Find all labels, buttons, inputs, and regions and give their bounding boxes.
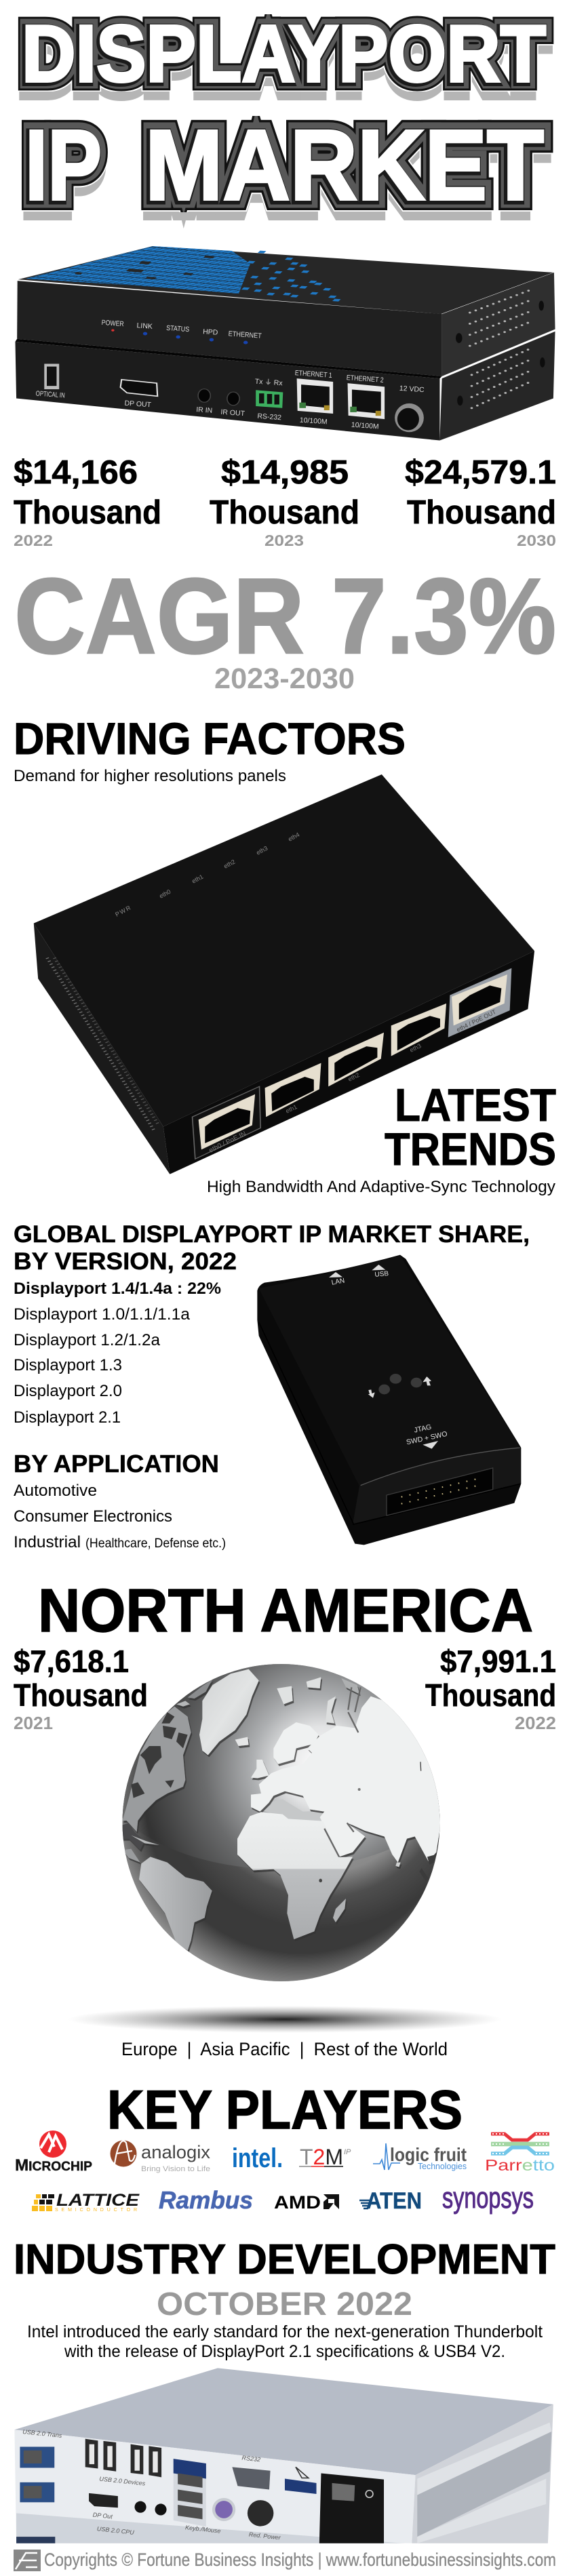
product image: JTAG probe: SWD + SWO [406,1430,448,1446]
latest trends text: High Bandwidth And Adaptive-Sync Technology [207,1178,555,1196]
heading: market share by version: BY VERSION, 2022 [14,1248,237,1275]
stat: 2023 market size: 2023 [264,532,304,549]
logo: Lattice Semiconductor: SEMICONDUCTOR [55,2208,137,2213]
labels on KVM extender: Keyb./Mouse [185,2524,221,2535]
product image: ethernet router: PWR [114,904,132,918]
logo: analogix: Bring Vision to Life [141,2165,210,2173]
logo: analogix [110,2140,211,2173]
product image: JTAG probe: LAN [331,1277,345,1287]
product image: DisplayPort extender: POWER [101,319,124,328]
product image: DisplayPort extender: DP OUT [124,399,152,409]
logo: Microchip: MICROCHIP [15,2156,92,2175]
globe ground shadow [68,2006,502,2033]
globe [122,1664,439,1981]
product image: ethernet router: eth0 [158,888,172,900]
development date: OCTOBER 2022 [157,2286,412,2322]
product image: ethernet router: eth1 [191,873,204,885]
version list: Displayport 1.0/1.1/1.1a [14,1305,190,1324]
heading: by application: BY APPLICATION [14,1450,219,1478]
logo: logic fruit: Technologies [418,2161,467,2171]
application list: (Healthcare, Defense etc.) [85,1537,226,1551]
land: continents [122,1669,440,1951]
product image: JTAG probe: USB [374,1270,389,1279]
stat: 2030 market size: 2030 [517,532,556,549]
development text: Intel introduced the early standard for the next-generation Thunderbolt [27,2322,543,2341]
stat: 2023 market size: $14,985 [221,454,349,491]
heading: industry development: INDUSTRY DEVELOPMENT [14,2236,555,2283]
title: IP Market: MARKET [145,110,544,221]
logo: Parretto [485,2134,555,2174]
product image: ethernet router: eth0 / PoE IN [208,1130,248,1155]
logo: AMD: AMD [274,2192,321,2213]
land: mediterranean and inland seas [263,1800,323,1819]
development text [27,2322,543,2361]
title: IP Market: MARKET [145,122,544,233]
stat: North America 2022: $7,991.1 [440,1644,556,1679]
title: IP Market: IP [25,110,102,221]
application list: Industrial [14,1533,81,1551]
product image: ethernet router [34,774,534,1174]
version list: Displayport 2.0 [14,1382,122,1400]
stat: 2023 market size: Thousand [210,494,359,531]
product image: DisplayPort extender: ETHERNET [228,330,262,340]
logo: logic fruit: logic fruit [390,2144,467,2165]
product image: ethernet router: eth3 [255,845,269,856]
logo: ATEN: ATEN [366,2188,422,2214]
stat: 2023 market size [210,454,359,549]
application list: Automotive [14,1482,97,1500]
product image: DisplayPort extender: LINK [136,321,153,331]
logo: AMD [274,2192,339,2213]
title: IP Market [24,110,544,233]
product image: DisplayPort extender: Tx ⏚ Rx [254,378,283,387]
version list: Displayport 1.4/1.4a : 22% [14,1280,221,1298]
application list: Consumer Electronics [14,1507,172,1526]
title: IP Market: MARKET [145,110,544,221]
version list [14,1280,221,1427]
product image: ethernet router: eth2 [222,858,236,870]
product image: ethernet router: eth3 [408,1042,423,1054]
stat: 2030 market size [405,454,556,549]
heading: latest trends [385,1079,556,1175]
product image: DisplayPort extender: STATUS [166,324,190,334]
blue dot pattern [26,246,340,302]
heading: driving factors: DRIVING FACTORS [14,713,406,764]
product image: ethernet router: eth2 [347,1071,361,1083]
labels on KVM extender [22,2428,281,2541]
footer logo [14,2550,41,2571]
heading: key players: KEY PLAYERS [107,2080,463,2141]
labels on KVM extender: RS232 [241,2455,261,2463]
stat: North America 2022 [425,1644,556,1733]
title: IP Market: MARKET [144,111,543,222]
stat: North America 2021 [14,1644,148,1733]
product image: DisplayPort extender: RS-232 [257,412,282,422]
product image: ethernet router: eth4 [287,831,300,843]
CAGR period: 2023-2030 [214,662,355,695]
logo: T2M IP: T2M [300,2145,343,2169]
logo: Rambus: Rambus [159,2186,253,2214]
application list [14,1482,226,1551]
product image: DisplayPort extender: ETHERNET 1 [294,369,332,380]
heading: north america: NORTH AMERICA [38,1577,533,1645]
product image: DisplayPort extender: IR OUT [220,408,246,418]
stat: North America 2022: 2022 [515,1713,556,1733]
stat: North America 2021: Thousand [14,1678,148,1713]
labels on KVM extender: DP Out [92,2512,113,2520]
stat: 2022 market size [14,454,161,549]
product image: DisplayPort extender [15,246,555,441]
logo: Parretto: Parr etto [485,2156,555,2174]
title: IP Market: IP [25,110,102,221]
version list: Displayport 1.3 [14,1356,122,1374]
stat: 2030 market size: $24,579.1 [405,454,556,491]
product image: DisplayPort extender: IR IN [196,405,213,415]
version list: Displayport 1.2/1.2a [14,1331,160,1349]
title: IP Market: IP [24,111,100,222]
title: IP Market: IP [25,110,102,221]
logo: analogix: analogix [141,2142,211,2162]
labels on KVM extender: Red. Power [248,2531,281,2541]
product image: DisplayPort extender: OPTICAL IN [35,390,65,399]
logo: Lattice Semiconductor [32,2191,140,2213]
logo: Microchip [15,2131,92,2175]
version list: Displayport 2.1 [14,1408,121,1427]
product image: DisplayPort extender: 12 VDC [399,384,425,394]
product image: DisplayPort extender: HPD [203,328,218,337]
stat: North America 2021: 2021 [14,1713,53,1733]
labels on KVM extender: USB 2.0 Trans [22,2428,62,2439]
stat: 2022 market size: Thousand [14,494,161,531]
stat: 2022 market size: 2022 [14,532,53,549]
title: IP Market: IP [25,122,102,233]
logo: Synopsys: synopsys [442,2181,534,2215]
product image: DisplayPort extender: 10/100M [299,416,328,426]
heading: market share by version [14,1221,530,1275]
land: dark details [131,1712,436,1882]
title: IP Market: MARKET [145,110,544,221]
product image: ethernet router: eth4 / PoE OUT [455,1008,497,1033]
logo: logic fruit [373,2143,467,2171]
stat: 2022 market size: $14,166 [14,454,138,491]
title: IP Market: MARKET [145,110,544,221]
logo: T2M IP: IP [344,2148,351,2156]
heading: latest trends: TRENDS [385,1124,556,1175]
heading: latest trends: LATEST [395,1079,556,1131]
logo: Lattice Semiconductor: LATTICE [56,2191,140,2210]
product image: DisplayPort extender: 10/100M [351,421,379,431]
logo: Intel: intel. [232,2143,283,2173]
other regions: Europe | Asia Pacific | Rest of the World [121,2039,448,2059]
stat: North America 2021: $7,618.1 [14,1644,129,1679]
stat: 2030 market size: Thousand [407,494,556,531]
driving factor text: Demand for higher resolutions panels [14,767,286,785]
development text: with the release of DisplayPort 2.1 specifications & USB4 V2. [64,2342,505,2361]
product image: JTAG probe [257,1255,521,1545]
labels on KVM extender: USB 2.0 CPU [96,2525,135,2536]
product image: KVM extender [14,2368,553,2551]
product image: JTAG probe: JTAG [413,1423,432,1435]
product image: DisplayPort extender: ETHERNET 2 [346,374,384,384]
title: IP Market: IP [25,110,102,221]
heading: market share by version: GLOBAL DISPLAYPORT IP MARKET SHARE, [14,1221,530,1248]
product image: ethernet router: eth1 [284,1103,298,1115]
labels on KVM extender: USB 2.0 Devices [99,2475,146,2487]
